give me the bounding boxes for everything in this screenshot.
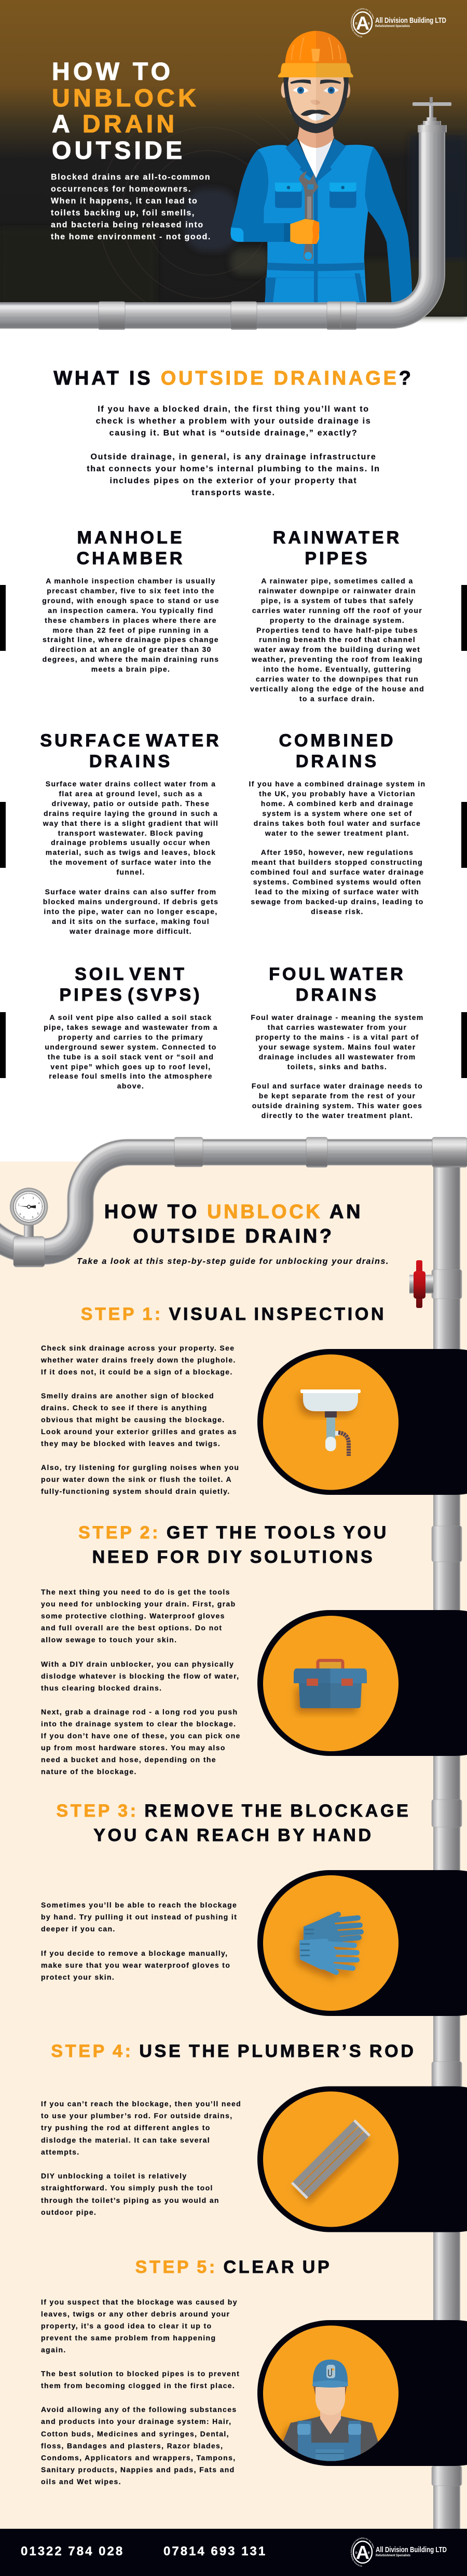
heading: manhole chamber: MANHOLE xyxy=(77,528,184,548)
text: step 1: Look around your exterior grilles and grates as xyxy=(41,1427,237,1436)
text: rainwater pipes: A rainwater pipe, sometimes called a xyxy=(261,577,414,585)
text: combined drains: lead to the mixing of surface water with xyxy=(255,888,419,896)
text: manhole chamber: A manhole inspection chamber is usually xyxy=(46,577,216,585)
text: step 2: you need for unblocking your drain. First, grab xyxy=(41,1600,236,1608)
hero title: OUTSIDE xyxy=(52,137,185,164)
section pipe with u-bend xyxy=(0,1144,467,1251)
heading: combined drains: DRAINS xyxy=(296,752,379,771)
text: foul water drains: Foul and surface water drainage needs to xyxy=(252,1082,423,1090)
text: soil vent pipes: underground sewer system. Connected to xyxy=(45,1043,217,1051)
hero paragraph xyxy=(51,173,211,241)
heading: surface water drains xyxy=(40,731,222,771)
worker: zipper and belt xyxy=(266,178,366,306)
worker: right sleeve xyxy=(365,147,413,306)
icon: plumber portrait xyxy=(283,2360,378,2463)
heading: step 5: STEP 5: CLEAR UP xyxy=(135,2257,332,2277)
text: step 2: nature of the blockage. xyxy=(41,1767,137,1776)
panel: step 5 icon xyxy=(257,2320,467,2466)
vertical pipe collars xyxy=(432,1270,462,2486)
panel: step 2 icon xyxy=(257,1610,467,1756)
text: rainwater pipes: water away from the building during wet xyxy=(254,645,420,653)
intro paragraphs: transports waste. xyxy=(191,488,276,497)
text: manhole chamber: straight line, where drainage pipes change xyxy=(43,635,219,644)
heading: step 3: STEP 3: REMOVE THE BLOCKAGE xyxy=(56,1801,411,1821)
heading: combined drains: COMBINED xyxy=(279,731,396,751)
text: step 2: With a DIY drain unblocker, you can physically xyxy=(41,1660,234,1668)
heading: step 2: NEED FOR DIY SOLUTIONS xyxy=(92,1547,375,1567)
text: soil vent pipes: the tube is a soil stack vent or “soil and xyxy=(48,1053,214,1061)
text: step 4: straightforward. You simply push the tool xyxy=(41,2184,213,2192)
heading: manhole chamber xyxy=(77,528,185,568)
text: step 1: Smelly drains are another sign of blocked xyxy=(41,1392,214,1400)
text: surface water drains: blocked mains underground. If debris gets xyxy=(43,897,218,906)
text: step 2: Next, grab a drainage rod - a long rod you push xyxy=(41,1708,238,1716)
text: surface water drains: flat area at ground level, such as a xyxy=(59,789,203,798)
text: step 5: The best solution to blocked pipes is to prevent xyxy=(41,2369,240,2378)
side bars row 2 right xyxy=(461,802,467,868)
text: step 5: Sanitary products, Nappies and pads, Fats and xyxy=(41,2465,235,2474)
text: rainwater pipes: vertically along the edge of the house and xyxy=(250,685,424,693)
hero paragraph: toilets backing up, foil smells, xyxy=(51,209,195,217)
text: manhole chamber: more than 22 feet of pipe running in a xyxy=(53,626,209,634)
text: surface water drains: drains require laying the ground in such a xyxy=(44,809,218,817)
logo: footer: A xyxy=(356,2542,369,2563)
text: foul water drains: directly to the water treatment plant. xyxy=(262,1111,413,1120)
text: rainwater pipes: into the home. Eventually, guttering xyxy=(263,665,411,673)
text: step 3: protect your skin. xyxy=(41,1973,115,1981)
text: combined drains: If you have a combined drainage system in xyxy=(249,780,425,788)
pressure gauge xyxy=(10,1188,48,1237)
text: foul water drains: your sewage system. Mains foul water xyxy=(258,1043,416,1051)
text: foul water drains: drainage includes all wastewater from xyxy=(259,1053,416,1061)
worker: ears xyxy=(281,82,350,98)
text: step 1: drains. Check to see if there is anything xyxy=(41,1403,208,1412)
text: foul water drains: be kept separate from the rest of your xyxy=(259,1092,416,1100)
intro paragraphs: If you have a blocked drain, the first thing you’ll want to xyxy=(98,405,369,414)
intro paragraphs: Outside drainage, in general, is any drainage infrastructure xyxy=(90,453,377,461)
heading: foul water drains: FOUL WATER xyxy=(269,964,406,984)
text: foul water drains: outside draining system. This water goes xyxy=(252,1101,422,1110)
text: combined drains: meant that builders stopped constructing xyxy=(252,858,423,866)
heading: soil vent pipes xyxy=(60,964,202,1005)
text: combined drains: water to the sewer treatment plant. xyxy=(265,829,409,837)
worker: eyebrows xyxy=(290,79,341,84)
panel: step 1 icon xyxy=(257,1349,467,1495)
text: step 2: If you don’t have one of these, you can pick one xyxy=(41,1732,241,1740)
intro paragraphs: check is whether a problem with your outside drainage is xyxy=(96,417,371,426)
icon: sink xyxy=(300,1389,361,1456)
text: combined drains: home. A combined kerb and drainage xyxy=(261,799,414,808)
worker: moustache xyxy=(300,110,331,116)
pressure gauge: 5 xyxy=(37,1212,39,1216)
logo: top: Refurbishment Specialists xyxy=(375,24,410,28)
text: soil vent pipes: pipe, takes sewage and wastewater from a xyxy=(44,1023,218,1031)
text: combined drains: combined foul and surface water drainage xyxy=(251,868,424,876)
text: step 3: Sometimes you’ll be able to reach the blockage xyxy=(41,1901,237,1909)
text: step 5: Condoms, Applicators and wrappers, Tampons, xyxy=(41,2454,236,2462)
text: surface water drains: funnel. xyxy=(116,868,145,876)
text: rainwater pipes: weather, preventing the roof from leaking xyxy=(252,655,423,663)
worker: mouth xyxy=(308,114,324,120)
icon: plumber's rod xyxy=(291,2119,370,2199)
subtitle: Take a look at this step-by-step guide for unblocking your drains. xyxy=(77,1257,389,1266)
side bars row 1 left xyxy=(0,585,6,651)
hero paragraph: and bacteria being released into xyxy=(51,221,204,229)
heading: how to unblock an outside drain xyxy=(104,1201,363,1247)
text: foul water drains: property to the mains - is a vital part of xyxy=(256,1033,419,1041)
text: manhole chamber: an inspection camera. You typically find xyxy=(48,606,214,615)
text: step 5: property, it’s a good idea to clear it up to xyxy=(41,2322,212,2330)
heading: foul water drains xyxy=(269,964,406,1005)
text: step 1: Check sink drainage across your property. See xyxy=(41,1344,235,1352)
heading: step 4: STEP 4: USE THE PLUMBER’S ROD xyxy=(51,2041,416,2061)
footer background xyxy=(0,2529,467,2576)
worker: eyes xyxy=(293,87,339,94)
text: step 2: into the drainage system to clear the blockage. xyxy=(41,1720,236,1728)
hero title xyxy=(52,58,199,164)
text: step 1: Also, try listening for gurgling noises when you xyxy=(41,1463,239,1471)
hero paragraph: Blocked drains are all-to-common xyxy=(51,173,211,182)
text: foul water drains: that carries wastewater from your xyxy=(268,1023,407,1031)
hero title: UNBLOCK xyxy=(52,84,199,112)
cream section background xyxy=(0,1162,467,2529)
worker: nose xyxy=(310,100,321,105)
hero paragraph: occurrences for homeowners. xyxy=(51,185,191,194)
text: rainwater pipes: property to the drainage system. xyxy=(270,616,405,624)
worker: left arm over torso xyxy=(231,223,290,242)
text: rainwater pipes: running beneath the roof that channel xyxy=(259,635,416,644)
text: step 2: some protective clothing. Waterproof gloves xyxy=(41,1612,225,1620)
text: manhole chamber: precast chamber, five to six feet into the xyxy=(47,587,215,595)
step 4 black pill xyxy=(257,2087,467,2232)
step 2 black pill xyxy=(257,1610,467,1756)
text: manhole chamber: these chambers in places where there are xyxy=(45,616,217,624)
text: step 4: dislodge the material. It can take several xyxy=(41,2136,210,2144)
hero paragraph: the home environment - not good. xyxy=(51,233,211,241)
hero valve xyxy=(413,97,451,132)
text: combined drains xyxy=(249,780,425,916)
worker illustration xyxy=(230,31,413,306)
text: step 1: If it does not, it could be a sign of a blockage. xyxy=(41,1368,233,1376)
worker: cuff xyxy=(230,227,243,242)
text: step 3: deeper if you can. xyxy=(41,1925,116,1933)
heading: rainwater pipes xyxy=(273,528,402,568)
intro paragraphs xyxy=(87,405,380,497)
text: soil vent pipes: A soil vent pipe also called a soil stack xyxy=(49,1013,212,1021)
text: rainwater pipes: carries water running off the roof of your xyxy=(252,606,422,615)
text: step 5: leaves, twigs or any other debris around your xyxy=(41,2310,230,2318)
heading: how to unblock an outside drain: OUTSIDE DRAIN? xyxy=(133,1225,334,1247)
logo: top: All Division Building LTD xyxy=(375,16,446,25)
logo: footer: B xyxy=(368,2552,370,2555)
text: rainwater pipes: rainwater downpipe or rainwater drain xyxy=(258,587,416,595)
heading: step 2 xyxy=(78,1523,389,1567)
pressure gauge: 1 xyxy=(18,1204,20,1207)
phone number 2: 07814 693 131 xyxy=(163,2544,267,2558)
worker: hard hat xyxy=(278,31,353,77)
text: step 4: outdoor pipe. xyxy=(41,2208,97,2216)
heading: step 3 xyxy=(56,1801,411,1845)
text: soil vent pipes: release foul smells into the atmosphere xyxy=(49,1072,213,1080)
worker: gloved hand xyxy=(290,219,320,244)
text: foul water drains xyxy=(251,1013,424,1120)
heading: step 2: STEP 2: GET THE TOOLS YOU xyxy=(78,1523,389,1543)
text: step 4: attempts. xyxy=(41,2148,80,2156)
hero background xyxy=(0,0,467,322)
worker: collar xyxy=(285,139,346,183)
step 2 orange circle xyxy=(263,1616,399,1751)
text: step 1: fully-functioning system should drain quietly. xyxy=(41,1487,230,1495)
text: combined drains: sewage from backed-up drains, leading to xyxy=(251,897,424,906)
text: manhole chamber: degrees, and where the main draining runs xyxy=(43,655,219,663)
text: rainwater pipes: pipe, is a system of tubes that safely xyxy=(261,596,414,605)
heading: soil vent pipes: SOIL VENT xyxy=(75,964,187,984)
side bars row 2 left xyxy=(0,802,6,868)
heading: step 1: STEP 1: VISUAL INSPECTION xyxy=(81,1304,386,1324)
text: step 2: up from most hardware stores. You may also xyxy=(41,1743,226,1752)
text: step 4: try pushing the rod at different angles to xyxy=(41,2123,211,2132)
section pipe collars xyxy=(13,1137,467,1267)
text: step 5: and products into your drainage system: Hair, xyxy=(41,2417,231,2425)
step 5 black pill xyxy=(257,2320,467,2466)
text: soil vent pipes: above. xyxy=(117,1082,144,1090)
phone number 1: 01322 784 028 xyxy=(21,2544,124,2558)
text: step 1: obvious that might be causing the blockage. xyxy=(41,1415,225,1424)
worker: wrench xyxy=(299,171,319,260)
worker: t-shirt xyxy=(297,137,334,183)
heading: combined drains xyxy=(279,731,396,771)
heading: how to unblock an outside drain: HOW TO UNBLOCK AN xyxy=(104,1201,363,1223)
text: foul water drains: Foul water drainage - meaning the system xyxy=(251,1013,424,1021)
text: rainwater pipes: to a surface drain. xyxy=(299,694,375,703)
step 1 black pill xyxy=(257,1349,467,1495)
vertical pipe xyxy=(433,1152,460,2529)
text: rainwater pipes: carries water to the downpipes that run xyxy=(256,675,419,683)
intro paragraphs: causing it. But what is “outside drainage,” exactly? xyxy=(109,429,358,438)
text: step 2: need a bucket and hose, depending on the xyxy=(41,1755,216,1764)
text: step 1: they may be blocked with leaves and twigs. xyxy=(41,1439,221,1448)
text: soil vent pipes xyxy=(44,1013,218,1090)
worker: beard and hair xyxy=(284,77,349,133)
text: foul water drains: toilets, sinks and baths. xyxy=(287,1062,387,1071)
logo: footer: All Division Building LTD xyxy=(376,2545,447,2554)
text: rainwater pipes xyxy=(250,577,424,703)
red valve xyxy=(409,1260,433,1308)
logo: footer: D xyxy=(355,2552,358,2555)
text: surface water drains: driveway, patio or outside path. These xyxy=(52,799,210,808)
side bars row 3 right xyxy=(461,1012,467,1078)
text: surface water drains: Surface water drains collect water from a xyxy=(46,780,216,788)
text: step 2: dislodge whatever is blocking the flow of water, xyxy=(41,1672,239,1680)
text: step 2: and full overall are the best options. Do not xyxy=(41,1624,222,1632)
text: step 4: If you can’t reach the blockage, then you’ll need xyxy=(41,2100,241,2108)
hero title: A DRAIN xyxy=(52,111,177,138)
text: surface water drains: and it sits on the surface, making foul xyxy=(52,917,210,925)
text: surface water drains: way that there is a slight gradient that will xyxy=(43,819,218,827)
intro paragraphs: that connects your home’s internal plumbing to the mains. In xyxy=(87,465,380,473)
text: step 5: again. xyxy=(41,2346,66,2354)
text: surface water drains: into the pipe, water can no longer escape, xyxy=(44,907,218,916)
pressure gauge: 2 xyxy=(23,1197,24,1200)
text: step 1 xyxy=(40,1344,239,1496)
hero pipe xyxy=(0,125,432,316)
heading: manhole chamber: CHAMBER xyxy=(77,549,185,568)
panel: step 3 icon xyxy=(257,1870,467,2016)
intro paragraphs: includes pipes on the exterior of your property that xyxy=(110,476,357,485)
heading: surface water drains: SURFACE WATER xyxy=(40,731,222,751)
logo: top: All Division Building Refurbishment Specialists For Your Home xyxy=(351,8,374,37)
pressure gauge: 0 xyxy=(20,1213,21,1216)
hero paragraph: When it happens, it can lead to xyxy=(51,197,198,206)
text: soil vent pipes: property and carries to the primary xyxy=(58,1033,203,1041)
text: combined drains: systems. Combined systems would often xyxy=(253,878,421,886)
text: step 5: prevent the same problem from happening xyxy=(41,2334,216,2342)
text: step 5: If you suspect that the blockage was caused by xyxy=(41,2298,238,2306)
text: step 5: them from becoming clogged in the first place. xyxy=(41,2381,235,2390)
step 3 black pill xyxy=(257,1870,467,2016)
text: manhole chamber: ground, with enough space to stand or use xyxy=(42,596,219,605)
worker: neck xyxy=(297,123,334,148)
heading: rainwater pipes: PIPES xyxy=(305,549,370,568)
text: surface water drains: transport wastewater. Block paving xyxy=(58,829,203,837)
text: surface water drains xyxy=(43,780,218,935)
pressure gauge: 0 xyxy=(32,1216,34,1219)
text: combined drains: the UK, you probably have a Victorian xyxy=(259,789,416,798)
text: step 2: The next thing you need to do is get the tools xyxy=(41,1588,230,1596)
hero pipe collars xyxy=(99,302,356,330)
text: step 3: by hand. Try pulling it out instead of pushing it xyxy=(41,1913,237,1921)
text: step 5: Cotton buds, Medicines and syringes, Dental, xyxy=(41,2430,229,2438)
text: manhole chamber: direction at an angle of greater than 30 xyxy=(50,645,212,653)
hero title: HOW TO xyxy=(52,58,173,86)
logo: top: D xyxy=(355,22,358,25)
text: soil vent pipes: vent pipe” which goes up to roof level, xyxy=(50,1062,211,1071)
text: surface water drains: the movement of surface water into the xyxy=(50,858,212,866)
worker: left sleeve xyxy=(231,149,290,242)
step 5 orange circle xyxy=(263,2325,399,2461)
heading: what is outside drainage: WHAT IS OUTSIDE DRAINAGE? xyxy=(53,367,414,389)
panel: step 4 icon xyxy=(257,2087,467,2232)
text: step 3: make sure that you wear waterproof gloves to xyxy=(41,1961,230,1969)
text: combined drains: disease risk. xyxy=(311,907,364,916)
text: combined drains: drains takes both foul water and surface xyxy=(254,819,421,827)
step 3 orange circle xyxy=(263,1875,399,2011)
heading: soil vent pipes: PIPES (SVPS) xyxy=(60,985,202,1005)
heading: surface water drains: DRAINS xyxy=(89,752,172,771)
logo: footer: Refurbishment Specialists xyxy=(376,2554,410,2557)
step 1 orange circle xyxy=(263,1355,399,1490)
logo: footer xyxy=(351,2537,447,2567)
worker: torso xyxy=(258,145,374,306)
text: surface water drains: Surface water drains can also suffer from xyxy=(45,888,216,896)
logo: top xyxy=(351,8,446,37)
step 4 orange circle xyxy=(263,2092,399,2227)
text: step 5: Avoid allowing any of the following substances xyxy=(41,2405,237,2414)
heading: rainwater pipes: RAINWATER xyxy=(273,528,402,548)
text: step 1: pour water down the sink or flush the toilet. A xyxy=(41,1475,232,1483)
text: step 5: oils and Wet wipes. xyxy=(41,2477,121,2486)
icon: gloves xyxy=(299,1914,361,1972)
text: step 2: allow sewage to touch your skin. xyxy=(41,1635,177,1644)
text: surface water drains: water drainage more difficult. xyxy=(70,927,192,935)
text: step 3 xyxy=(41,1899,237,1983)
worker: forearm shade xyxy=(284,223,290,242)
text: step 2 xyxy=(40,1588,241,1776)
text: step 5: floss, Bandages and plasters, Razor blades, xyxy=(41,2442,223,2450)
text: surface water drains: material, such as twigs and leaves, block xyxy=(46,848,216,856)
text: manhole chamber xyxy=(42,577,219,674)
text: surface water drains: drainage problems usually occur when xyxy=(51,838,211,847)
logo: footer: All Division Building Refurbishment Specialists For Your Home xyxy=(351,2537,374,2567)
text: step 1: whether water drains freely down the plughole. xyxy=(41,1356,236,1364)
text: combined drains: system is a system where one set of xyxy=(262,809,413,817)
pressure gauge: 3 xyxy=(33,1197,34,1200)
text: step 4 xyxy=(41,2098,241,2218)
worker: face xyxy=(287,77,345,131)
side bars row 1 right xyxy=(461,585,467,651)
pressure gauge: 4 xyxy=(38,1202,40,1205)
text: step 4: DIY unblocking a toilet is relatively xyxy=(41,2172,187,2180)
icon: toolbox xyxy=(294,1660,367,1708)
text: rainwater pipes: Properties tend to have half-pipe tubes xyxy=(256,626,418,634)
text: step 3: If you decide to remove a blockage manually, xyxy=(41,1949,228,1957)
heading: step 3: YOU CAN REACH BY HAND xyxy=(93,1825,374,1845)
pressure gauge: 0 xyxy=(23,1216,25,1219)
text: combined drains: After 1950, however, new regulations xyxy=(261,848,414,856)
heading: foul water drains: DRAINS xyxy=(296,985,379,1005)
worker: chest pockets xyxy=(275,183,356,208)
text: step 4: through the toilet’s piping as you would an xyxy=(41,2196,219,2204)
text: manhole chamber: meets a brain pipe. xyxy=(91,665,170,673)
text: step 5 xyxy=(41,2296,240,2488)
logo: top: B xyxy=(368,22,370,25)
text: step 4: to use your plumber’s rod. For outside drains, xyxy=(41,2111,233,2120)
side bars row 3 left xyxy=(0,1012,6,1078)
logo: top: A xyxy=(356,12,369,34)
text: step 2: thus clearing blocked drains. xyxy=(41,1684,162,1692)
